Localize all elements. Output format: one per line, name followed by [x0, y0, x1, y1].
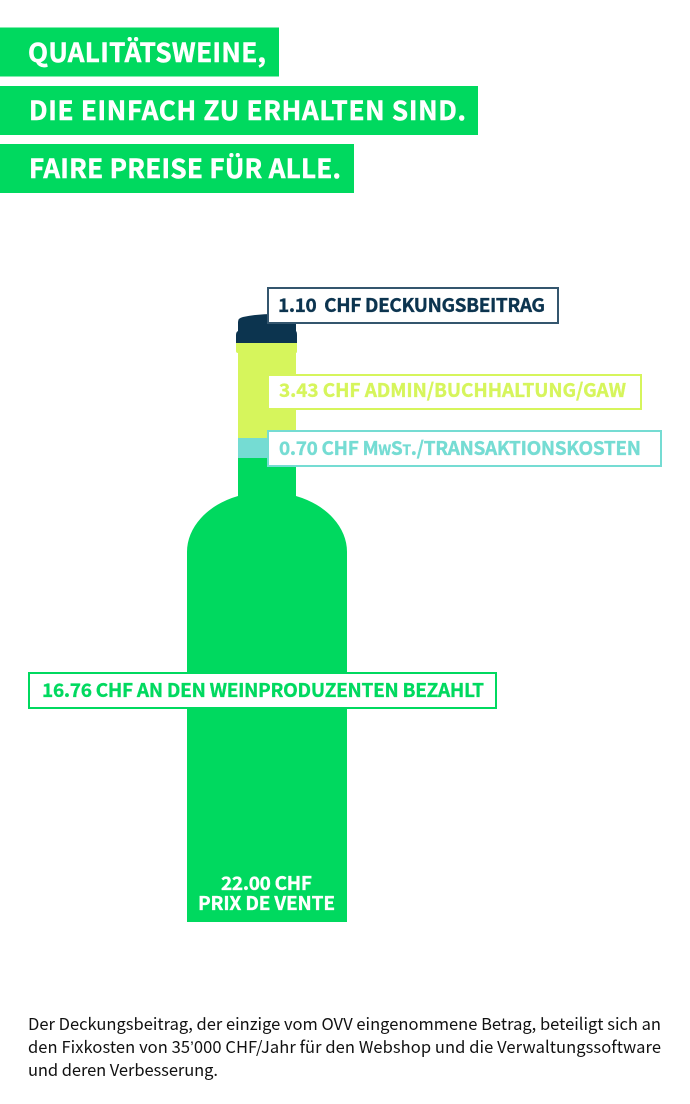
sale price label: 22.00 CHF [221, 869, 312, 896]
sale price label: PRIX DE VENTE [198, 889, 335, 916]
title line 1 [0, 28, 279, 76]
label: VAT and transaction costs: 0.70 CHF MWST./TRANSAKTIONSKOSTEN [279, 434, 641, 461]
title [0, 28, 478, 193]
bottle body: producer share [187, 458, 347, 922]
sale price label [198, 869, 335, 916]
explanatory paragraph: Der Deckungsbeitrag, der einzige vom OVV eingenommene Betrag, beteiligt sich an [28, 1011, 661, 1035]
bottle neck: VAT and transaction share [238, 438, 296, 458]
label: contribution margin: 1.10 CHF DECKUNGSBEITRAG [278, 291, 545, 318]
title line 2: DIE EINFACH ZU ERHALTEN SIND. [29, 91, 466, 128]
label: paid to wine producers: 16.76 CHF AN DEN WEINPRODUZENTEN BEZAHLT [42, 676, 484, 703]
title line 3 [0, 144, 354, 193]
explanatory paragraph: und deren Verbesserung. [28, 1057, 218, 1081]
title line 1: QUALITÄTSWEINE, [28, 33, 266, 70]
bottle neck: administration share [236, 343, 297, 438]
title line 3: FAIRE PREISE FÜR ALLE. [29, 149, 341, 186]
explanatory paragraph: den Fixkosten von 35’000 CHF/Jahr für den Webshop und die Verwaltungssoftware [28, 1034, 661, 1058]
title line 2 [0, 86, 478, 135]
bottle cap: contribution margin [236, 314, 297, 343]
label: administration: 3.43 CHF ADMIN/BUCHHALTUNG/GAW [279, 376, 626, 403]
explanatory paragraph [28, 1011, 661, 1081]
wine bottle [187, 314, 347, 922]
